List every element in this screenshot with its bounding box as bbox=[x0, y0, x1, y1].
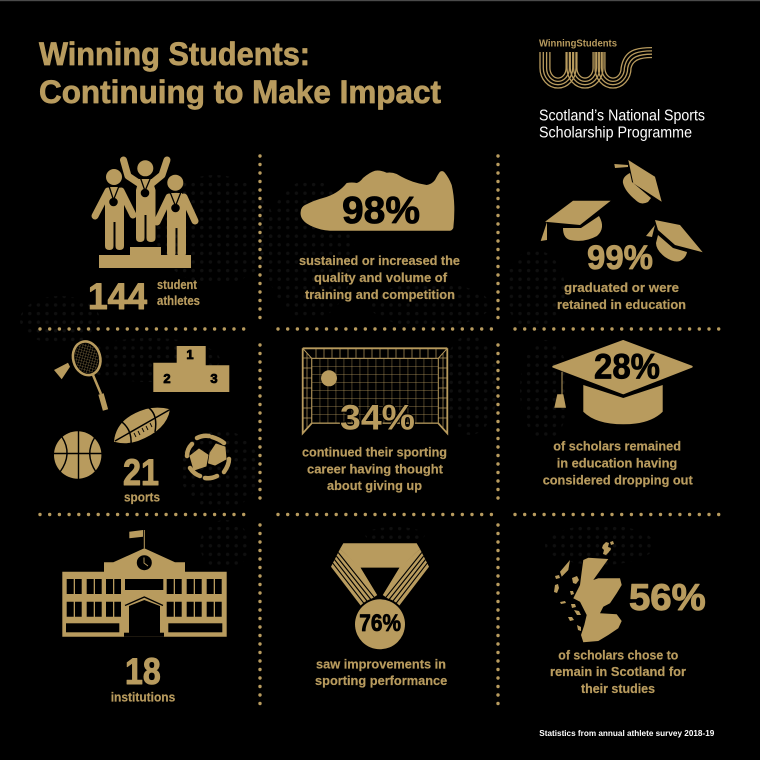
icon: medal bbox=[331, 543, 429, 651]
icon: winners podium: 1 bbox=[186, 347, 194, 362]
panel: remained in Scotland bbox=[550, 541, 706, 696]
icon: rugby ball bbox=[114, 408, 170, 444]
stat: 18: 18 bbox=[125, 651, 161, 692]
logo strapline: Scotland’s National Sports bbox=[539, 108, 705, 124]
stat: 56%: 56% bbox=[629, 577, 706, 618]
icon: football bbox=[187, 436, 229, 478]
panel: sporting performance bbox=[315, 543, 447, 688]
icon: racket and shuttlecock bbox=[54, 338, 106, 410]
title bbox=[39, 36, 441, 110]
icon: mortarboard bbox=[553, 341, 692, 424]
icon: map of Scotland bbox=[554, 541, 622, 642]
footnote: Statistics from annual athlete survey 2018-19 bbox=[539, 728, 715, 738]
icon: university building bbox=[62, 530, 227, 637]
title: Continuing to Make Impact bbox=[39, 74, 441, 110]
text: remained in education: considered dropping out bbox=[543, 472, 693, 487]
text: training: training and competition bbox=[305, 287, 455, 302]
panel: graduated bbox=[541, 160, 703, 312]
dotted grid dividers bbox=[40, 156, 722, 710]
logo: Winning Students bbox=[539, 38, 652, 88]
text: sporting career: about giving up bbox=[327, 478, 422, 493]
text: remained in Scotland: remain in Scotland for bbox=[550, 664, 686, 679]
icon: winners podium: 2 bbox=[163, 371, 171, 386]
panel: sporting career bbox=[302, 348, 447, 493]
stat: 28%: 28% bbox=[594, 347, 660, 386]
logo strapline bbox=[539, 108, 705, 142]
icon: athletes on podium bbox=[95, 160, 195, 268]
icon: winners podium bbox=[153, 346, 229, 392]
text: graduated: retained in education bbox=[557, 297, 686, 312]
stat: 34%: 34% bbox=[340, 398, 415, 437]
text: graduated: graduated or were bbox=[564, 280, 679, 295]
text: sporting performance: sporting performance bbox=[315, 673, 447, 688]
text: sporting career: career having thought bbox=[307, 462, 444, 476]
text: remained in education bbox=[543, 439, 693, 487]
stat: 99%: 99% bbox=[587, 239, 653, 277]
logo strapline: Scholarship Programme bbox=[539, 124, 692, 142]
panel: training and competition bbox=[299, 171, 460, 302]
label: student athletes: athletes bbox=[157, 293, 200, 308]
text: graduated bbox=[557, 280, 686, 312]
text: remained in Scotland bbox=[550, 647, 686, 696]
stat: 21: 21 bbox=[123, 452, 159, 493]
text: sporting performance: saw improvements in bbox=[316, 656, 446, 671]
label: student athletes bbox=[157, 277, 200, 308]
text: training bbox=[299, 253, 460, 302]
text: remained in Scotland: of scholars chose to bbox=[558, 647, 678, 662]
text: remained in Scotland: their studies bbox=[581, 681, 655, 696]
icon: shoe bbox=[301, 171, 454, 231]
panel: sports bbox=[54, 338, 229, 504]
panel: remained in education bbox=[543, 341, 693, 487]
text: remained in education: of scholars remained bbox=[553, 439, 681, 454]
title: Winning Students: bbox=[39, 36, 310, 72]
icon: goal net bbox=[303, 348, 447, 433]
stat: 144: 144 bbox=[88, 276, 147, 317]
label: institutions: institutions bbox=[111, 690, 175, 705]
icon: winners podium: 3 bbox=[210, 371, 218, 386]
icon: basketball bbox=[54, 431, 102, 479]
stat: 98%: 98% bbox=[342, 190, 420, 232]
label: sports: sports bbox=[124, 490, 160, 504]
panel: student athletes bbox=[88, 160, 200, 317]
text: sporting performance bbox=[315, 656, 447, 688]
stat: 76%: 76% bbox=[359, 610, 401, 637]
text: training: sustained or increased the bbox=[299, 253, 460, 268]
label: student athletes: student bbox=[157, 277, 198, 292]
text: training: quality and volume of bbox=[314, 270, 448, 285]
icon: graduation caps bbox=[541, 160, 703, 262]
text: sporting career: continued their sporting bbox=[302, 445, 447, 460]
text: sporting career bbox=[302, 445, 447, 493]
panel: institutions bbox=[62, 530, 227, 705]
text: remained in education: in education having bbox=[557, 455, 677, 470]
logo: Winning Students: WinningStudents bbox=[539, 38, 617, 50]
